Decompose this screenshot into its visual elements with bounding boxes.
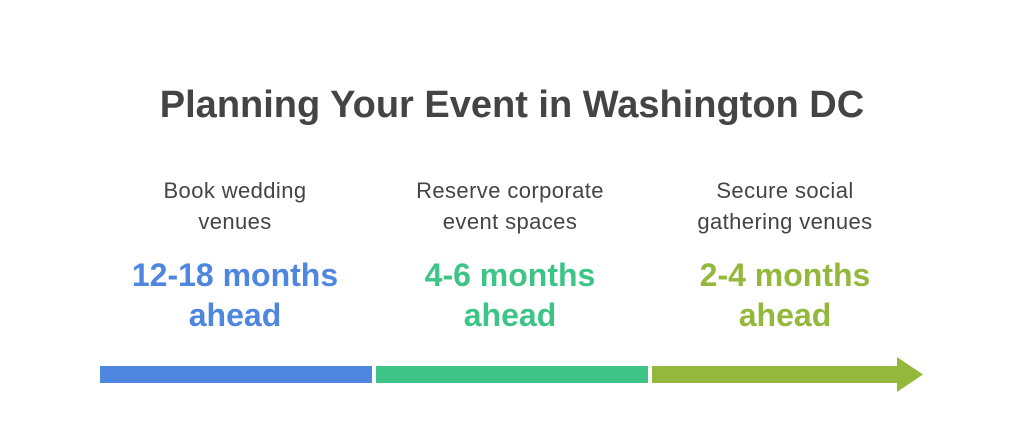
timeframe: wedding bbox=[132, 257, 338, 333]
label: wedding: Book wedding bbox=[163, 178, 306, 203]
label: corporate: event spaces bbox=[443, 209, 577, 234]
label: corporate bbox=[416, 178, 604, 234]
label: wedding: venues bbox=[198, 209, 272, 234]
timeframe: social: ahead bbox=[739, 297, 831, 333]
label: corporate: Reserve corporate bbox=[416, 178, 604, 203]
column: wedding bbox=[132, 178, 338, 333]
timeframe: social bbox=[700, 257, 870, 333]
label: social bbox=[697, 178, 873, 234]
timeframe: wedding: 12-18 months bbox=[132, 257, 338, 293]
timeframe: social: 2-4 months bbox=[700, 257, 870, 293]
label: social: gathering venues bbox=[697, 209, 873, 234]
column: corporate bbox=[416, 178, 604, 333]
column: social bbox=[697, 178, 873, 333]
label: social: Secure social bbox=[716, 178, 854, 203]
timeframe: corporate bbox=[425, 257, 595, 333]
timeframe: corporate: ahead bbox=[464, 297, 556, 333]
label: wedding bbox=[163, 178, 306, 234]
timeframe: wedding: ahead bbox=[189, 297, 281, 333]
title: Planning Your Event in Washington DC bbox=[160, 84, 864, 126]
timeframe: corporate: 4-6 months bbox=[425, 257, 595, 293]
